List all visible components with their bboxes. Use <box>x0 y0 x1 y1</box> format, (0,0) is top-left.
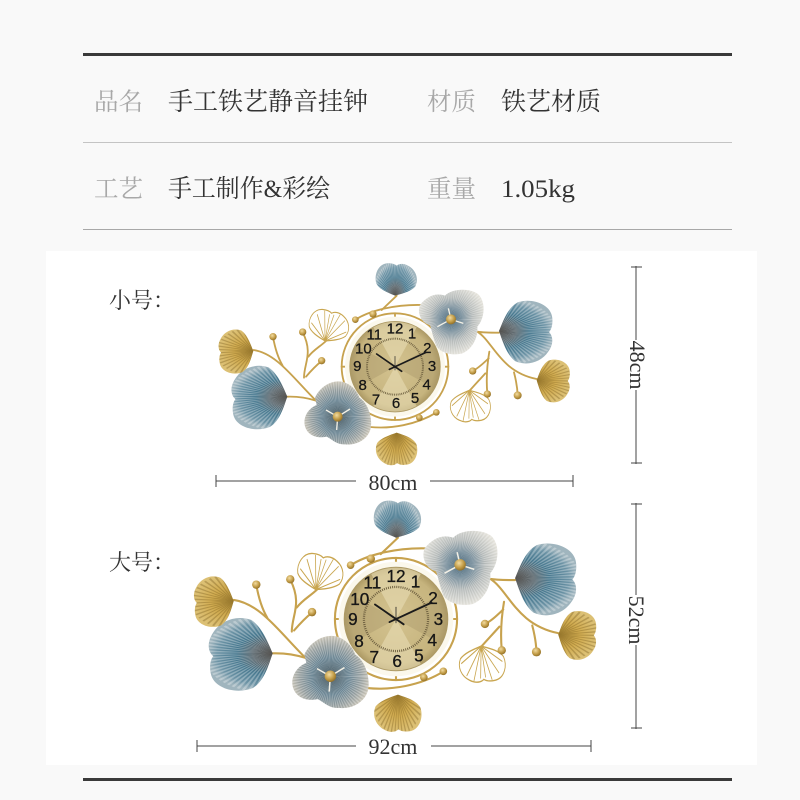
clock numerals: small: 8 <box>358 377 367 394</box>
clock numerals: large: 3 <box>434 609 443 629</box>
clock numerals: large: 5 <box>414 645 424 665</box>
spec table <box>83 53 732 230</box>
small size label: 小号： <box>109 288 175 313</box>
label: craft: 工艺 <box>94 175 143 203</box>
width dimension: large: 92cm <box>369 734 417 759</box>
height dimension: large <box>624 503 649 729</box>
clock numerals: small: 4 <box>422 376 431 393</box>
clock numerals: small: 3 <box>428 358 436 375</box>
clock numerals: large: 12 <box>386 566 406 586</box>
label: weight: 重量 <box>427 175 476 203</box>
clock numerals: small: 7 <box>372 391 380 408</box>
clock numerals: large: 2 <box>428 588 438 608</box>
height dimension: large: 52cm <box>624 596 649 644</box>
clock numerals: large: 10 <box>350 589 369 609</box>
clock numerals: small <box>353 320 436 412</box>
value: weight: 1.05kg <box>501 176 576 203</box>
large size label: 大号： <box>109 550 175 575</box>
width dimension: large <box>197 734 591 759</box>
clock numerals: small: 12 <box>387 320 403 337</box>
value: product name: 手工铁艺静音挂钟 <box>168 88 368 116</box>
height dimension: small: 48cm <box>625 341 650 389</box>
clock numerals: small: 9 <box>353 358 362 375</box>
large wall clock illustration <box>193 499 597 732</box>
clock numerals: large: 1 <box>411 572 420 592</box>
value: material: 铁艺材质 <box>501 88 601 116</box>
clock numerals: small: 5 <box>411 390 419 407</box>
clock numerals: small: 2 <box>423 340 432 357</box>
clock numerals: large: 11 <box>363 573 381 593</box>
clock numerals: large: 7 <box>369 647 379 667</box>
value: craft: 手工制作&彩绘 <box>168 175 330 203</box>
panel: size comparison <box>46 251 757 765</box>
clock numerals: small: 6 <box>392 395 400 412</box>
clock numerals: large: 6 <box>392 651 402 671</box>
label: material: 材质 <box>427 88 476 116</box>
clock numerals: small: 10 <box>355 340 372 357</box>
height dimension: small <box>625 266 650 464</box>
clock numerals: large: 4 <box>427 630 437 650</box>
small wall clock illustration <box>218 262 571 465</box>
clock numerals: large: 9 <box>348 609 358 629</box>
label: product name: 品名 <box>94 88 143 116</box>
clock numerals: large <box>348 566 443 671</box>
width dimension: small <box>216 470 573 495</box>
clock numerals: large: 8 <box>354 631 364 651</box>
clock numerals: small: 11 <box>367 326 382 343</box>
clock numerals: small: 1 <box>408 325 416 342</box>
width dimension: small: 80cm <box>369 470 417 495</box>
